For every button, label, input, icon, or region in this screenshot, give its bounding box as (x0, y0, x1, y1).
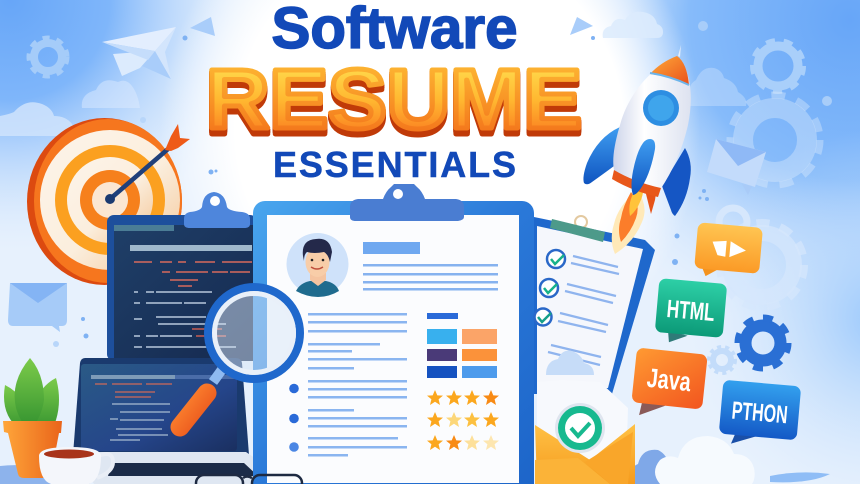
document (537, 380, 628, 470)
arrow shaft (110, 149, 168, 199)
pot (3, 421, 62, 478)
avatar (286, 233, 348, 297)
skill bubbles (630, 222, 801, 449)
nose cone (650, 56, 689, 85)
icon: small paper plane right (570, 17, 593, 35)
bubble: video (694, 222, 763, 281)
bubble: Java: Java (645, 363, 693, 397)
lens (208, 287, 300, 379)
collar (612, 170, 661, 197)
flame (612, 190, 645, 254)
second clipboard with checklist (534, 216, 655, 394)
paper (267, 215, 519, 483)
star ratings (427, 390, 499, 450)
code lines (134, 262, 252, 347)
envelope front (535, 458, 610, 484)
icon: blue gear (738, 318, 788, 368)
clipboard frame (253, 201, 534, 484)
icon: coffee cup (39, 447, 113, 484)
heading: ESSENTIALS: ESSENTIALS (273, 144, 516, 185)
monitor clip (184, 192, 250, 228)
icon: large paper plane (102, 27, 176, 79)
background gears, clouds and planes (0, 12, 832, 373)
icon: envelope with document (535, 351, 635, 484)
colour swatches (427, 313, 497, 378)
checklist items (534, 250, 619, 365)
icon: small paper plane left (190, 17, 215, 36)
window (643, 90, 679, 126)
bubble: HTML (654, 278, 727, 347)
monitor with code (107, 192, 259, 361)
header lines (363, 242, 498, 290)
bullets (289, 384, 299, 452)
envelope back (535, 424, 635, 484)
leaves (4, 385, 33, 434)
clip (550, 216, 605, 242)
icon: rocket (583, 45, 691, 254)
icon: magnifying glass (180, 287, 300, 427)
icon: glasses (196, 475, 302, 484)
right fin (662, 148, 691, 216)
main clipboard (253, 184, 534, 484)
left fin (583, 127, 620, 184)
laptop (73, 358, 293, 484)
icon: envelope right (707, 139, 766, 195)
bubble: Java (630, 347, 708, 422)
bubble: Python (718, 380, 801, 449)
clipboard clip (350, 184, 464, 221)
small cloud (546, 351, 594, 375)
handle (213, 364, 226, 382)
experience lines (308, 313, 407, 456)
title (206, 0, 582, 185)
icon: envelope left (8, 283, 67, 332)
icon: white cloud (627, 436, 830, 484)
body (613, 57, 691, 190)
bubble: Python: PTHON (731, 397, 789, 429)
keyboard base (74, 452, 293, 484)
center fin (632, 139, 655, 195)
clouds (0, 12, 746, 136)
icon: target with arrow (27, 118, 190, 285)
scattered dots (53, 21, 832, 347)
bubble: HTML: HTML (666, 295, 716, 327)
heading: RESUME: RESUME (206, 52, 582, 146)
arrow fletching (165, 124, 190, 151)
icon: potted plant (3, 358, 62, 478)
approved badge (555, 403, 605, 453)
